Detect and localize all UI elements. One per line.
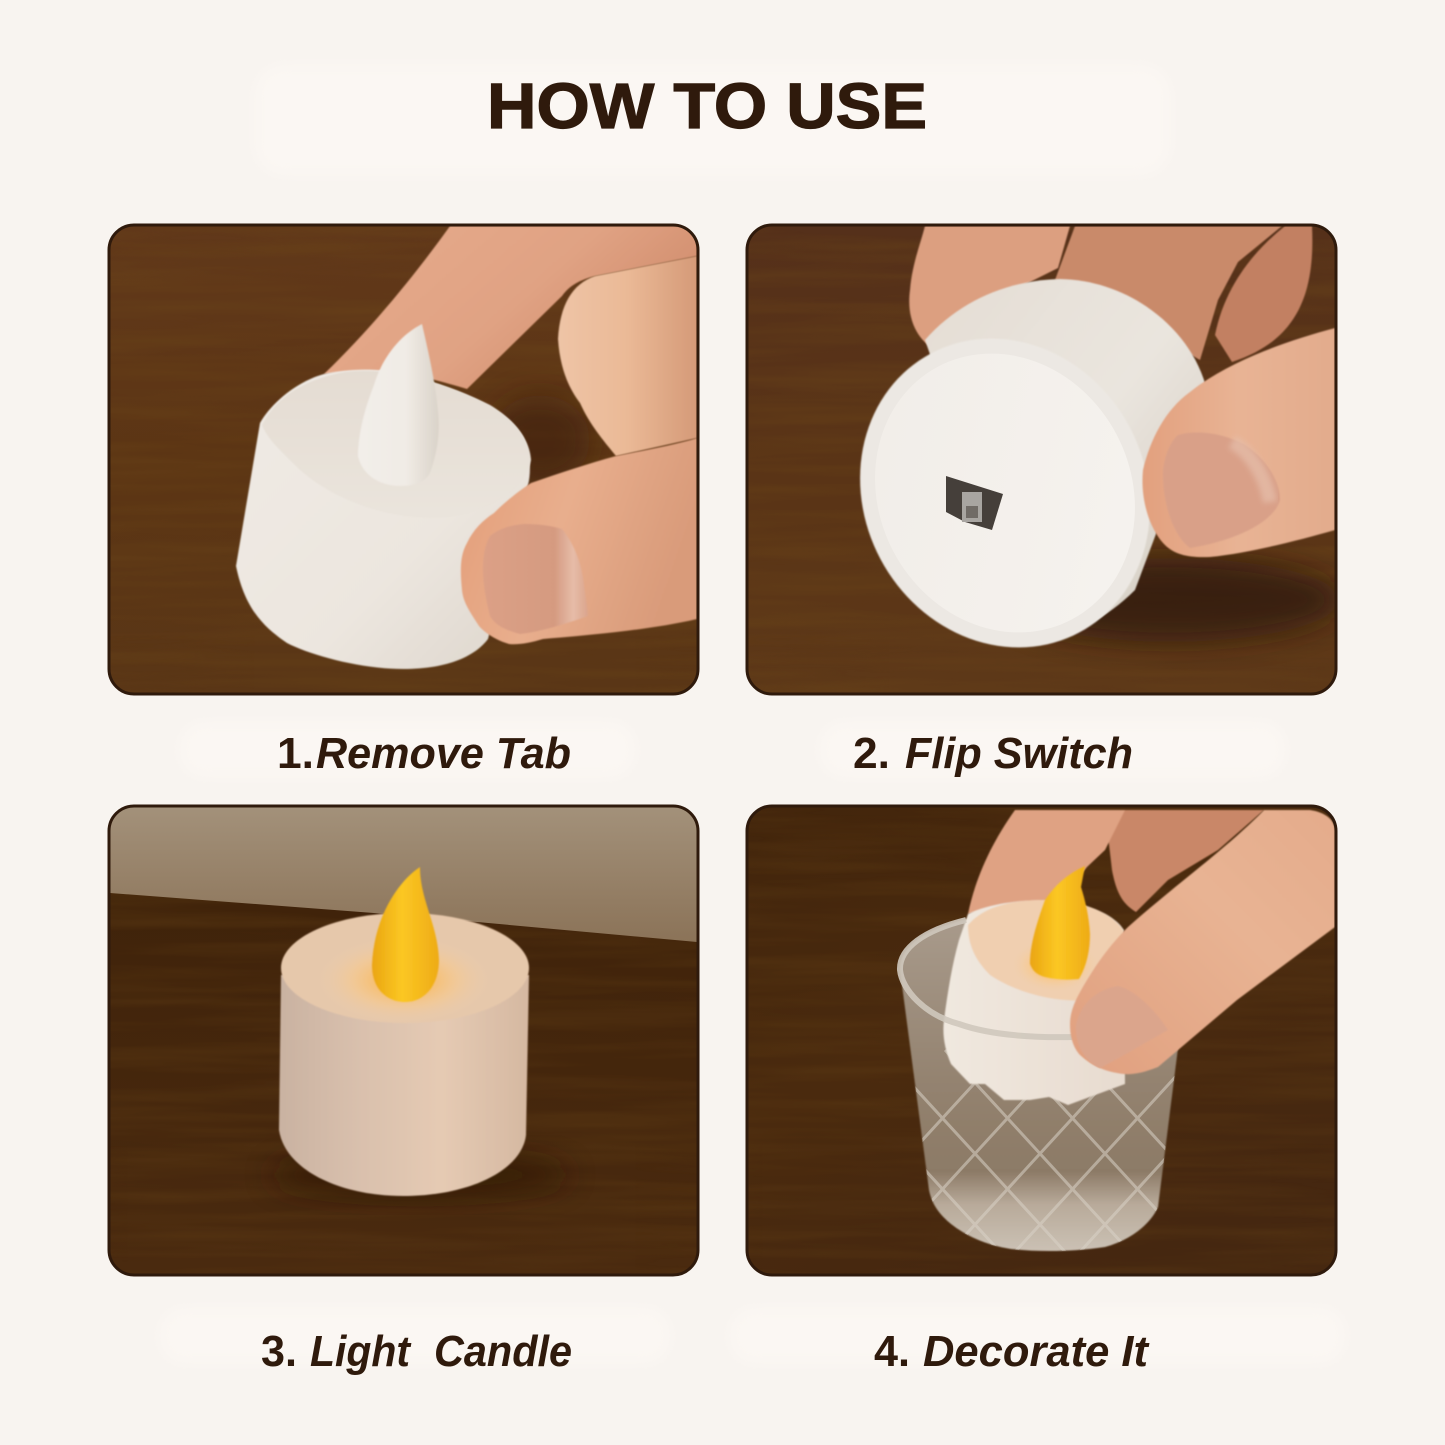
icon: thumb and hand	[1070, 810, 1335, 1074]
step 1 caption: 1.	[277, 729, 314, 778]
icon: middle finger	[558, 256, 697, 456]
icon: thumbnail	[1076, 986, 1168, 1068]
icon: thumb	[1142, 328, 1335, 557]
icon: thumb	[461, 438, 697, 644]
step 3 caption: Light	[310, 1327, 412, 1376]
icon: lit tealight	[279, 913, 529, 1196]
icon: fingers above	[909, 226, 1312, 362]
icon: tealight cylinder	[925, 279, 1208, 640]
icon: fingers behind	[968, 810, 1264, 914]
panel: step 2 photo	[747, 225, 1340, 699]
step 3 caption	[261, 1327, 572, 1376]
icon: tealight in glass	[943, 900, 1125, 1105]
step 3 caption: Candle	[434, 1327, 572, 1376]
icon: lit flame	[372, 867, 439, 1002]
step 4 caption: 4.	[874, 1327, 910, 1376]
title: HOW TO USE	[487, 70, 927, 142]
step 1 caption: Remove Tab	[316, 729, 571, 778]
panel: step 4 photo	[747, 806, 1336, 1290]
icon: tealight body	[236, 370, 530, 669]
wall background	[110, 807, 697, 942]
panel: step 1 photo	[109, 225, 698, 694]
step 3 caption: 3.	[261, 1327, 297, 1376]
icon: index finger	[324, 226, 697, 389]
icon: thumbnail	[483, 524, 588, 634]
icon: switch	[946, 476, 1003, 530]
icon: glass cup	[900, 918, 1178, 1252]
panel: step 3 photo	[109, 806, 698, 1275]
icon: thumbnail	[1163, 432, 1280, 548]
icon: lit flame	[1030, 866, 1090, 980]
step 4 caption: Decorate It	[923, 1327, 1150, 1376]
glass rim	[900, 920, 1075, 1037]
icon: tealight top surface	[262, 371, 532, 482]
step 2 caption: 2.	[853, 729, 890, 778]
icon: unlit flame	[358, 324, 439, 486]
step 2 caption: Flip Switch	[905, 729, 1133, 778]
icon: tealight base	[859, 339, 1150, 649]
